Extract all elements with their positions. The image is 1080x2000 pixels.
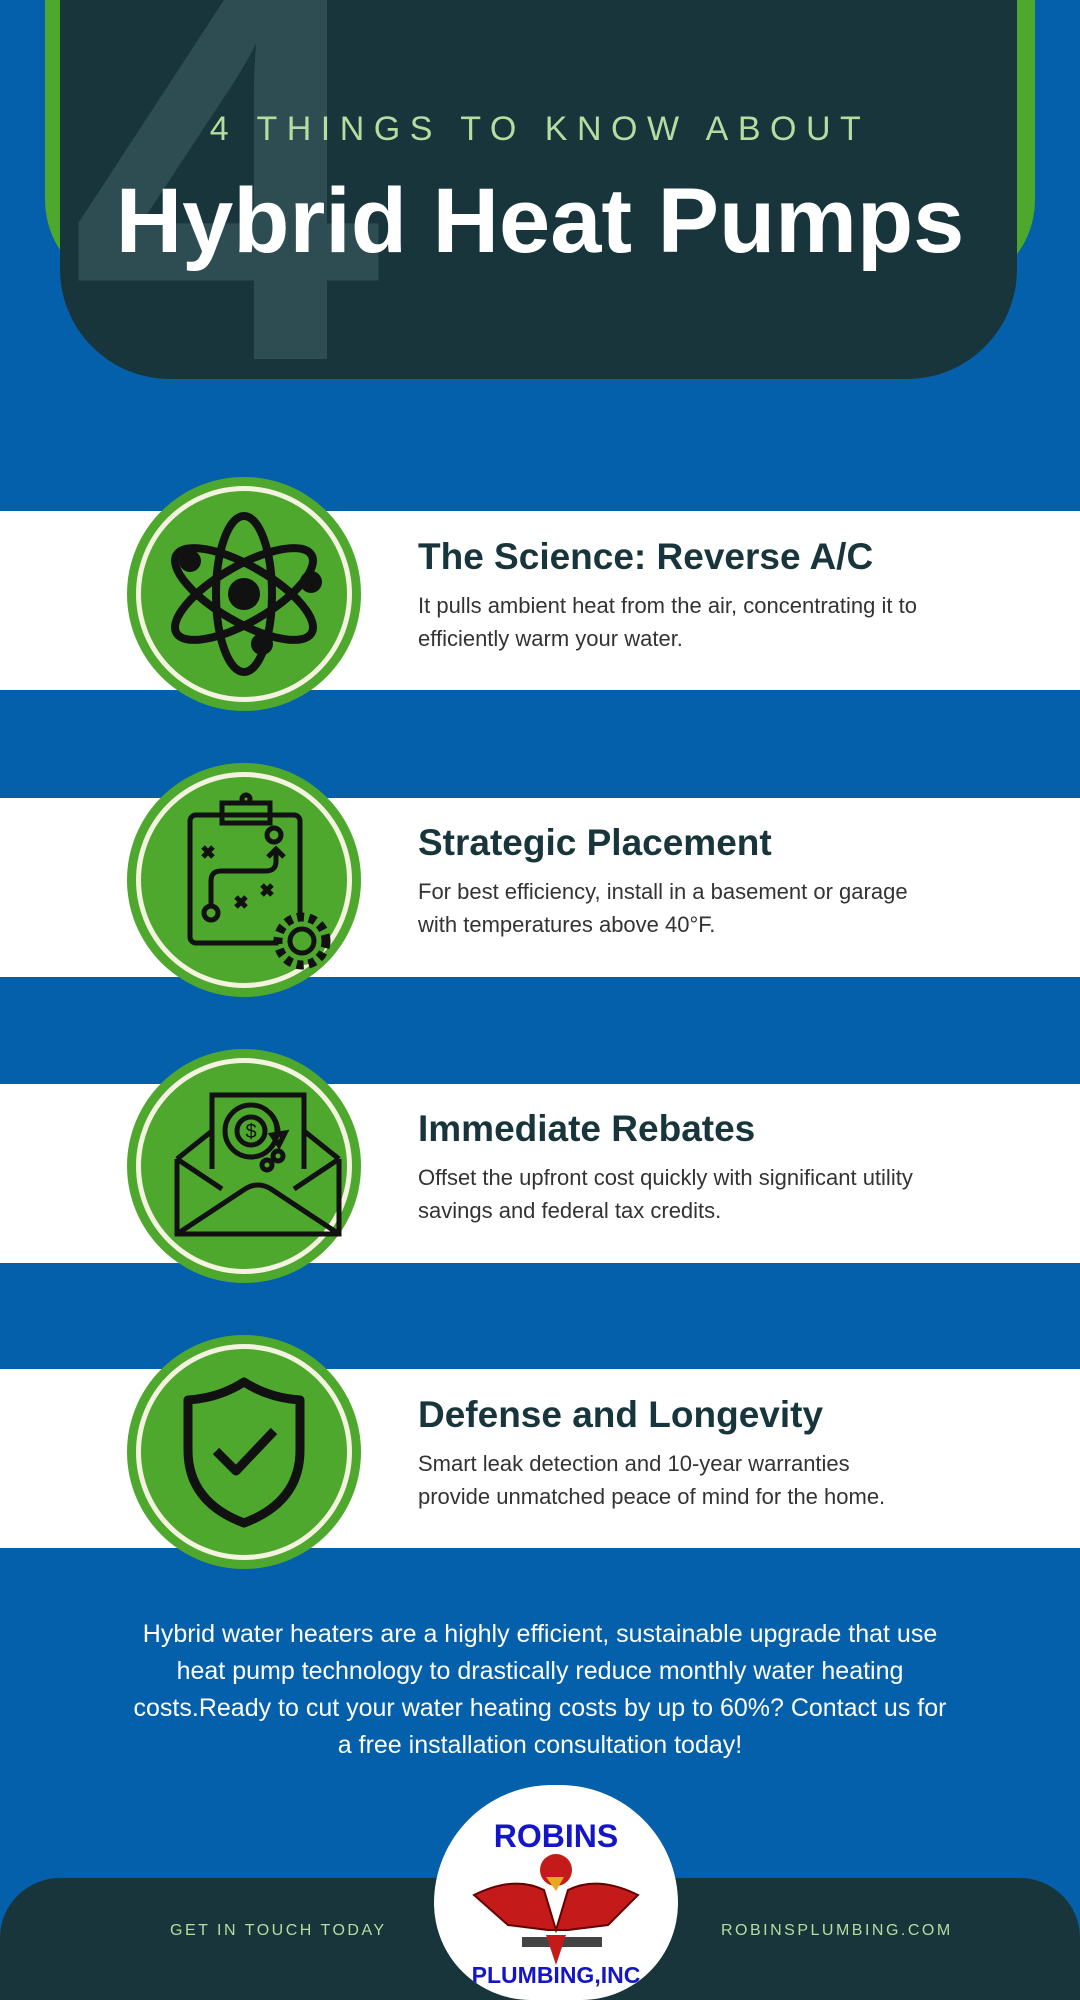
text: placement: For best efficiency, install in a basement or garage with temperatures above 40°F. bbox=[418, 879, 908, 937]
icon: atom bbox=[127, 477, 361, 711]
icon: envelope with dollar bbox=[127, 1049, 361, 1283]
text: defense: Defense and Longevity bbox=[418, 1394, 823, 1435]
text: defense bbox=[418, 1394, 885, 1509]
text: rebates bbox=[418, 1108, 913, 1223]
text: rebates: Immediate Rebates bbox=[418, 1108, 755, 1149]
text: science bbox=[418, 536, 917, 651]
header green frame bbox=[45, 0, 1035, 290]
icon: clipboard plan bbox=[127, 763, 361, 997]
text: placement bbox=[418, 822, 908, 937]
header dark panel bbox=[60, 0, 1017, 379]
text: science: The Science: Reverse A/C bbox=[418, 536, 873, 577]
row 4 bbox=[0, 1335, 1080, 1569]
text: rebates: Offset the upfront cost quickly with significant utility savings and federal tax credits. bbox=[418, 1165, 913, 1223]
icon: envelope with dollar: $ bbox=[245, 1121, 257, 1143]
text: science: It pulls ambient heat from the air, concentrating it to efficiently warm your water. bbox=[418, 593, 917, 651]
icon: shield check bbox=[127, 1335, 361, 1569]
logo bbox=[434, 1785, 678, 2000]
closing paragraph: Hybrid water heaters are a highly efficient, sustainable upgrade that use heat pump technology to drastically reduce monthly water heating costs.Ready to cut your water heating costs by up to 60%? Contact us for a free installation consultation today! bbox=[134, 1620, 946, 1759]
footer text right: ROBINSPLUMBING.COM bbox=[721, 1922, 953, 1939]
subtitle: 4 THINGS TO KNOW ABOUT bbox=[210, 110, 870, 148]
text: defense: Smart leak detection and 10-year warranties provide unmatched peace of mind for the home. bbox=[418, 1451, 885, 1509]
row 3 bbox=[0, 1049, 1080, 1283]
row 1 bbox=[0, 477, 1080, 711]
footer text left: GET IN TOUCH TODAY bbox=[170, 1922, 387, 1939]
footer band bbox=[0, 1878, 1080, 2000]
row 2 bbox=[0, 763, 1080, 997]
text: placement: Strategic Placement bbox=[418, 822, 772, 863]
title: Hybrid Heat Pumps bbox=[116, 170, 964, 272]
logo: PLUMBING,INC bbox=[472, 1962, 640, 1988]
logo: ROBINS bbox=[494, 1818, 618, 1854]
